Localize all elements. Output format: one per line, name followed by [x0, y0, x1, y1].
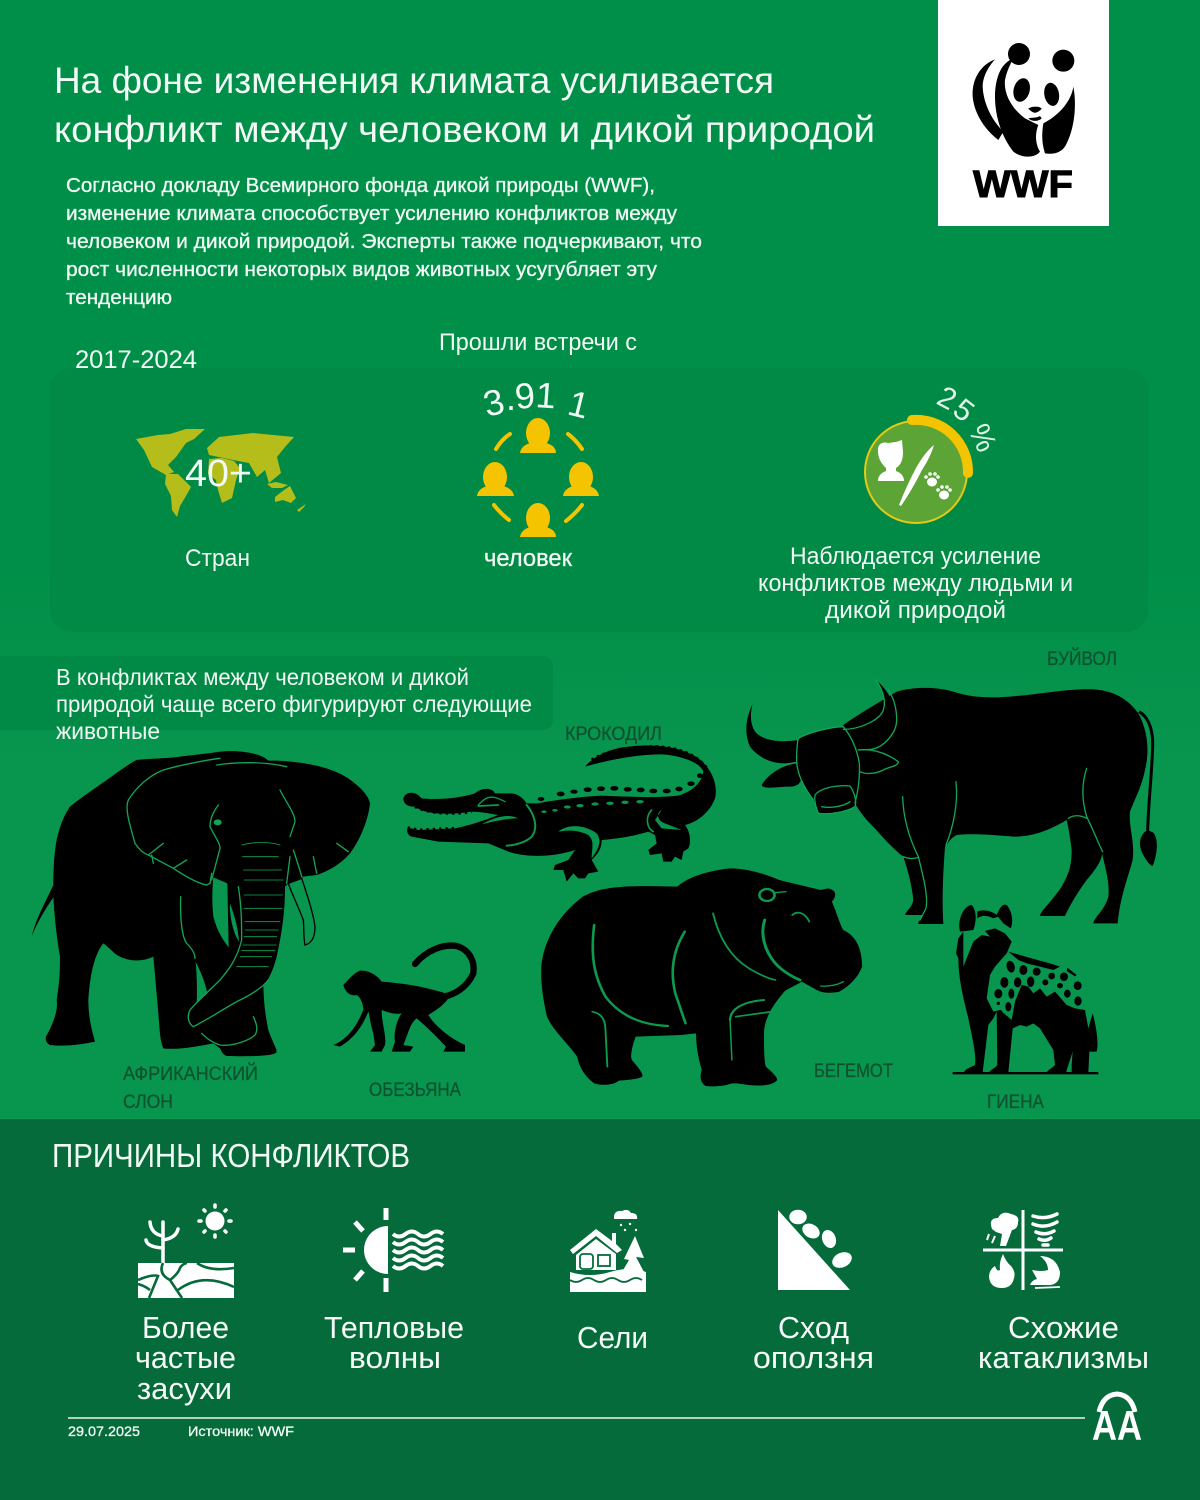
intro text: человеком и дикой природой. Эксперты также подчеркивают, что: [66, 231, 702, 253]
icon: hyena: [953, 905, 1098, 1074]
panel: statistics: [50, 329, 1148, 632]
icon: buffalo: [746, 680, 1157, 924]
intro text: изменение климата способствует усилению конфликтов между: [66, 203, 677, 225]
icon: human vs wildlife circle: [865, 420, 968, 523]
period label: 2017-2024: [75, 346, 197, 374]
icon: natural disasters: [983, 1210, 1063, 1290]
intro text: [66, 175, 702, 309]
people label: человек: [484, 545, 572, 572]
label: hyena: ГИЕНА: [987, 1092, 1044, 1113]
label: landslides: оползня: [753, 1340, 874, 1375]
intro text: Согласно докладу Всемирного фонда дикой природы (WWF),: [66, 175, 655, 197]
conflict note: дикой природой: [825, 597, 1006, 624]
label: heat waves: волны: [349, 1340, 441, 1375]
label: crocodile: КРОКОДИЛ: [565, 724, 662, 745]
intro text: тенденцию: [66, 287, 172, 309]
icon: mudflow: [570, 1210, 646, 1292]
people number: 3.911: [479, 374, 593, 427]
label: droughts: [135, 1310, 236, 1406]
title: [54, 60, 875, 150]
icon: heat wave: [343, 1208, 443, 1292]
label: landslides: [753, 1310, 874, 1375]
icon: elephant: [32, 751, 370, 1056]
panel: causes: [0, 1119, 1200, 1500]
title: конфликт между человеком и дикой природой: [54, 109, 875, 150]
WWF logo: [938, 0, 1109, 226]
label: African elephant: [123, 1063, 258, 1113]
meetings heading: Прошли встречи с: [439, 329, 637, 356]
footer: [68, 1418, 1085, 1439]
label: droughts: Более: [142, 1310, 229, 1345]
label: buffalo: БУЙВОЛ: [1047, 648, 1117, 670]
label: similar disasters: катаклизмы: [978, 1340, 1149, 1375]
label: heat waves: Тепловые: [324, 1310, 464, 1345]
label: monkey: ОБЕЗЬЯНА: [369, 1080, 461, 1101]
label: African elephant: СЛОН: [123, 1092, 173, 1113]
footer: 29.07.2025: [68, 1423, 140, 1439]
panel: animals intro: животные: [56, 718, 160, 744]
conflict note: Наблюдается усиление: [790, 543, 1041, 570]
countries number: 40+: [185, 453, 252, 495]
label: African elephant: АФРИКАНСКИЙ: [123, 1063, 258, 1085]
panel: animals intro: [0, 656, 553, 744]
icon: world map: [136, 429, 306, 517]
icon: hippo: [541, 868, 862, 1086]
icon: crocodile: [403, 745, 716, 882]
icon: monkey: [333, 946, 474, 1052]
label: landslides: Сход: [778, 1310, 849, 1345]
label: similar disasters: Схожие: [1008, 1310, 1119, 1345]
WWF logo: WWF: [973, 164, 1073, 206]
label: heat waves: [324, 1310, 464, 1375]
label: hippo: БЕГЕМОТ: [814, 1061, 893, 1082]
label: droughts: засухи: [137, 1371, 232, 1406]
conflict note: [758, 543, 1073, 624]
footer: Источник: WWF: [188, 1423, 294, 1439]
icon: landslide: [778, 1209, 855, 1290]
icon: AA logo: AA: [1092, 1402, 1142, 1449]
icon: drought: [138, 1205, 234, 1298]
countries label: Стран: [185, 545, 250, 572]
label: similar disasters: [978, 1310, 1149, 1375]
label: droughts: частые: [135, 1340, 236, 1375]
panel: animals intro: В конфликтах между человеком и дикой: [56, 664, 469, 690]
title: На фоне изменения климата усиливается: [54, 60, 774, 101]
causes heading: ПРИЧИНЫ КОНФЛИКТОВ: [52, 1137, 410, 1174]
panel: animals intro: природой чаще всего фигурируют следующие: [56, 691, 532, 717]
percentage: 25%: [932, 380, 1003, 457]
intro text: рост численности некоторых видов животных усугубляет эту: [66, 259, 657, 281]
icon: people circle: [477, 418, 599, 537]
label: mudflows: Сели: [577, 1320, 648, 1355]
conflict note: конфликтов между людьми и: [758, 570, 1073, 597]
